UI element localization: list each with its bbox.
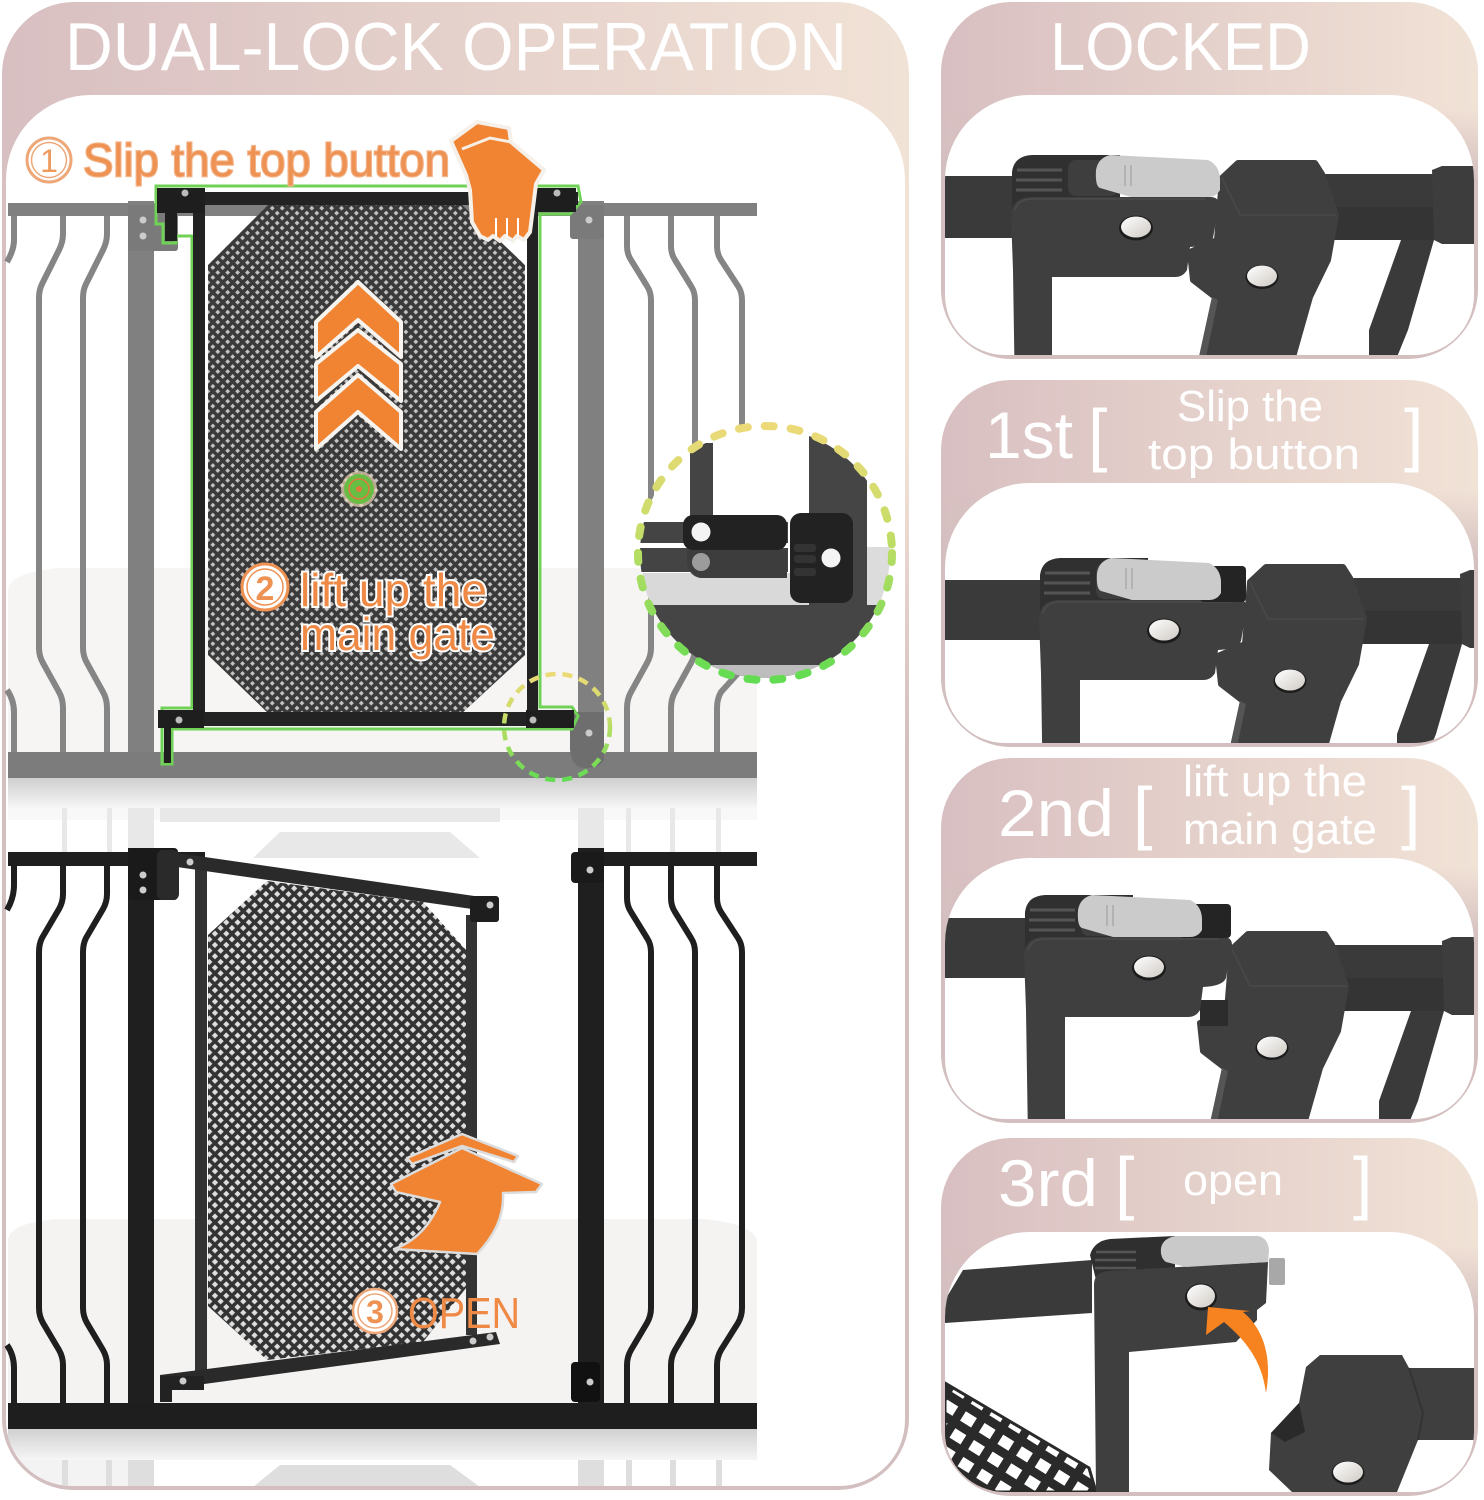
- icon: green target: [341, 471, 377, 507]
- step 3 label: [353, 1289, 520, 1338]
- heading: 1st slip the top button: Slip the: [1177, 382, 1323, 431]
- arrow: lift and open: [391, 1134, 542, 1254]
- panel background: [941, 1138, 1478, 1496]
- heading: 3rd open: ]: [1353, 1143, 1372, 1221]
- lock mechanism: button slipped: [945, 558, 1474, 743]
- heading: 1st slip the top button: top button: [1148, 430, 1360, 479]
- floor and reflections: [8, 568, 757, 1487]
- panel: second step: [941, 757, 1484, 1140]
- step 1 label: 1: [40, 143, 58, 179]
- panel: first step: [941, 380, 1478, 747]
- step 3 label: 3: [366, 1294, 384, 1330]
- panel background: [2, 2, 909, 1490]
- heading: 2nd lift up the main gate: [998, 757, 1420, 854]
- callout marker: small dashed circle: [504, 674, 610, 780]
- heading: dual-lock operation: DUAL-LOCK OPERATION: [65, 9, 847, 85]
- step 2 label: main gate: [300, 608, 495, 660]
- step 2 label: [242, 564, 495, 660]
- heading: 2nd lift up the main gate: main gate: [1183, 805, 1377, 854]
- panel background: [941, 758, 1478, 1123]
- heading: 3rd open: 3rd: [998, 1146, 1098, 1220]
- heading: 1st slip the top button: [985, 382, 1423, 479]
- panel background: [941, 380, 1478, 747]
- heading: 1st slip the top button: ]: [1404, 395, 1423, 473]
- lock mechanism: locked: [945, 155, 1474, 355]
- heading: 3rd open: [: [1115, 1143, 1134, 1221]
- open gate door: [160, 852, 500, 1402]
- heading: 1st slip the top button: [: [1088, 395, 1107, 473]
- step 3 label: OPEN: [408, 1289, 520, 1338]
- step 2 label: lift up the: [300, 564, 487, 616]
- heading: locked: LOCKED: [1050, 9, 1311, 85]
- mesh panel: locked gate: [208, 203, 525, 715]
- step 2 label: 2: [256, 570, 274, 608]
- open gate frame (black): [7, 848, 757, 1429]
- lock mechanism: gate lifted: [945, 895, 1474, 1119]
- step 1 label: Slip the top button: [83, 134, 450, 186]
- heading: 2nd lift up the main gate: 2nd: [998, 776, 1114, 850]
- heading: 3rd open: open: [1183, 1156, 1283, 1205]
- heading: 3rd open: [998, 1143, 1372, 1221]
- panel: dual-lock operation: [2, 2, 909, 1490]
- panel: third step: [941, 1138, 1480, 1496]
- icon: orange hand: [451, 122, 544, 241]
- panel: locked: [941, 2, 1478, 359]
- locked gate frame (grey): [7, 201, 757, 778]
- callout: magnified lock detail: [630, 426, 900, 685]
- heading: 2nd lift up the main gate: ]: [1401, 773, 1420, 851]
- icon: up chevrons: [316, 282, 401, 449]
- lock mechanism: open: [945, 1236, 1480, 1492]
- heading: 2nd lift up the main gate: [: [1133, 773, 1152, 851]
- heading: 2nd lift up the main gate: lift up the: [1183, 757, 1367, 806]
- panel background: [941, 2, 1478, 359]
- green highlighted gate frame: [156, 186, 581, 764]
- heading: 1st slip the top button: 1st: [985, 398, 1073, 472]
